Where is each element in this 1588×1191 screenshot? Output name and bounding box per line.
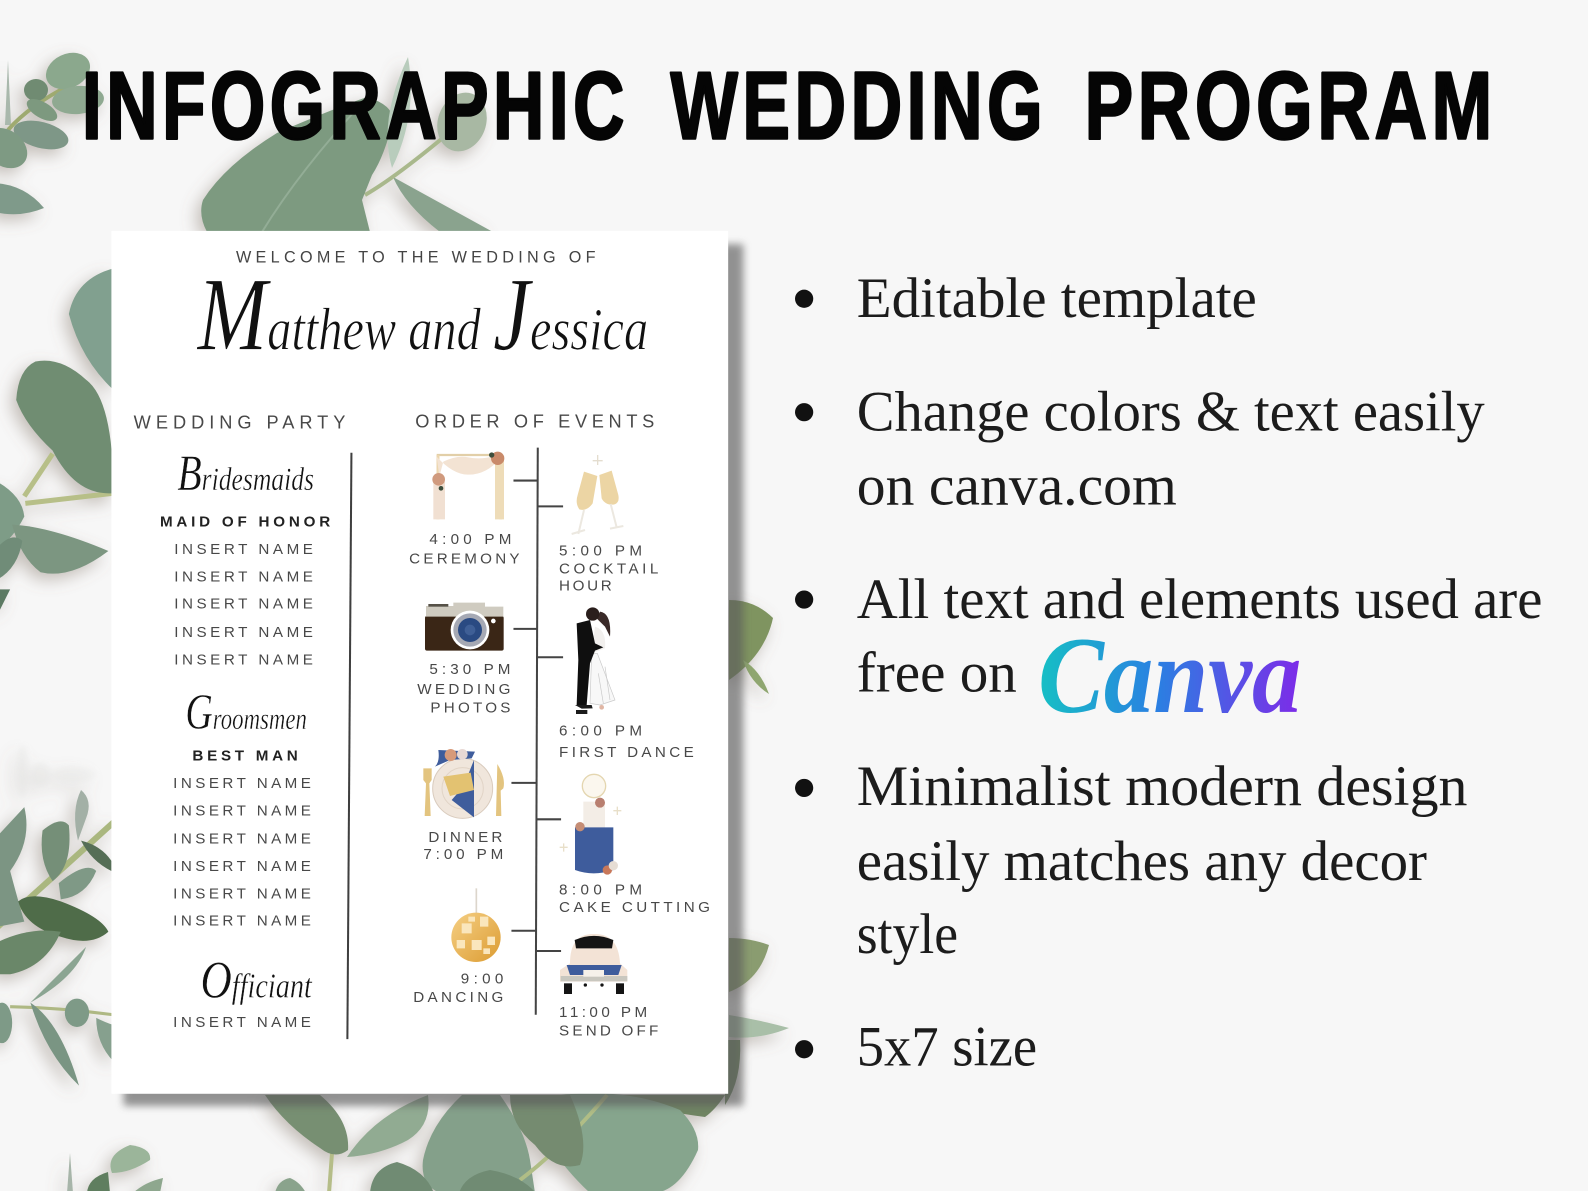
event labels: 11:00 PM xyxy=(559,1004,647,1021)
event labels: CAKE CUTTING xyxy=(559,899,710,916)
script: bridesmaids: Bridesmaids xyxy=(177,445,314,501)
timeline xyxy=(511,448,563,1015)
card heading: welcome: WELCOME TO THE WEDDING OF xyxy=(236,248,596,266)
bullet: change colors xyxy=(795,380,1485,517)
bridesmaid names: INSERT NAME xyxy=(174,568,313,585)
script: groomsmen: Groomsmen xyxy=(185,684,307,740)
bridesmaid names: INSERT NAME xyxy=(174,541,313,558)
event labels: HOUR xyxy=(559,578,612,595)
leaf cluster: bottom xyxy=(265,1093,725,1191)
groomsmen names: INSERT NAME xyxy=(173,885,311,902)
groomsmen names xyxy=(173,775,311,930)
bridesmaid names xyxy=(174,541,313,668)
event labels: FIRST DANCE xyxy=(559,744,694,761)
leaf cluster: faint shadowed sprig xyxy=(16,745,95,798)
event labels: 9:00 xyxy=(461,971,503,988)
event labels: 4:00 PM xyxy=(429,531,511,548)
officiant name: INSERT NAME xyxy=(173,1014,311,1031)
feature list xyxy=(795,267,1542,1078)
column divider xyxy=(347,453,351,1039)
bullet: editable template: Editable template xyxy=(857,267,1257,330)
event labels: DANCING xyxy=(413,989,503,1006)
icon: champagne glasses xyxy=(572,455,623,534)
icon: getaway car xyxy=(560,934,627,994)
event labels: COCKTAIL xyxy=(559,561,658,578)
bullet: minimalist design: style xyxy=(857,903,958,966)
groomsmen names: INSERT NAME xyxy=(173,858,311,875)
best man: BEST MAN xyxy=(192,748,298,765)
leaf cluster: lower left xyxy=(0,790,113,1086)
groomsmen names: INSERT NAME xyxy=(173,913,311,930)
icon: disco ball xyxy=(451,888,501,962)
groomsmen names: INSERT NAME xyxy=(173,831,311,848)
event labels: PHOTOS xyxy=(430,699,510,716)
event labels: 7:00 PM xyxy=(423,846,503,863)
title: INFOGRAPHIC xyxy=(82,54,629,160)
icon: camera xyxy=(425,603,504,651)
event labels: DINNER xyxy=(428,829,502,846)
event labels: SEND OFF xyxy=(559,1022,658,1039)
bullet: change colors: Change colors & text easily xyxy=(857,380,1485,443)
groomsmen names: INSERT NAME xyxy=(173,802,311,819)
leaf cluster: left middle xyxy=(0,268,113,614)
script: officiant: Officiant xyxy=(201,952,313,1010)
leaf cluster: large top leaf xyxy=(201,57,495,232)
maid of honor: MAID OF HONOR xyxy=(160,514,330,531)
canva logo: Canva xyxy=(1038,615,1301,736)
program card xyxy=(111,231,728,1094)
bridesmaid names: INSERT NAME xyxy=(174,651,313,668)
leaf cluster: right of card xyxy=(725,600,789,1105)
bullet: free on canva: free on xyxy=(857,642,1017,705)
bullet: size: 5x7 size xyxy=(857,1015,1037,1078)
leaf cluster: top left sprig xyxy=(0,46,105,214)
bullet: minimalist design xyxy=(795,755,1467,966)
event labels: 5:00 PM xyxy=(559,542,642,559)
bridesmaid names: INSERT NAME xyxy=(174,624,313,641)
heading: order of events: ORDER OF EVENTS xyxy=(415,411,654,431)
card shadow xyxy=(124,244,743,1106)
wedding party column xyxy=(160,445,330,1031)
eucalyptus leaves: top xyxy=(0,46,495,232)
bridesmaid names: INSERT NAME xyxy=(174,596,313,613)
heading: wedding party: WEDDING PARTY xyxy=(134,412,345,432)
event labels: WEDDING xyxy=(417,681,510,698)
leaf cluster: bottom left sprig xyxy=(67,1145,163,1191)
bullet: free on canva xyxy=(795,568,1542,736)
icon: wedding arch xyxy=(432,452,504,519)
icon: wedding cake xyxy=(560,774,621,875)
bullet: free on canva: All text and elements used are xyxy=(857,568,1542,631)
icon: dancing couple xyxy=(575,607,615,714)
bullet: minimalist design: Minimalist modern design xyxy=(857,755,1467,818)
event labels: 6:00 PM xyxy=(559,723,642,740)
title: WEDDING xyxy=(670,54,1047,160)
event labels: 8:00 PM xyxy=(559,882,642,899)
event labels: CEREMONY xyxy=(409,550,520,567)
icon: dinner plate xyxy=(423,749,504,818)
event labels: 5:30 PM xyxy=(429,661,510,678)
bullet: minimalist design: easily matches any decor xyxy=(857,830,1427,893)
couple names: Matthew and Jessica xyxy=(196,255,648,372)
groomsmen names: INSERT NAME xyxy=(173,775,311,792)
bullet: change colors: on canva.com xyxy=(857,454,1177,517)
event labels xyxy=(409,531,710,1039)
title xyxy=(82,54,1497,160)
